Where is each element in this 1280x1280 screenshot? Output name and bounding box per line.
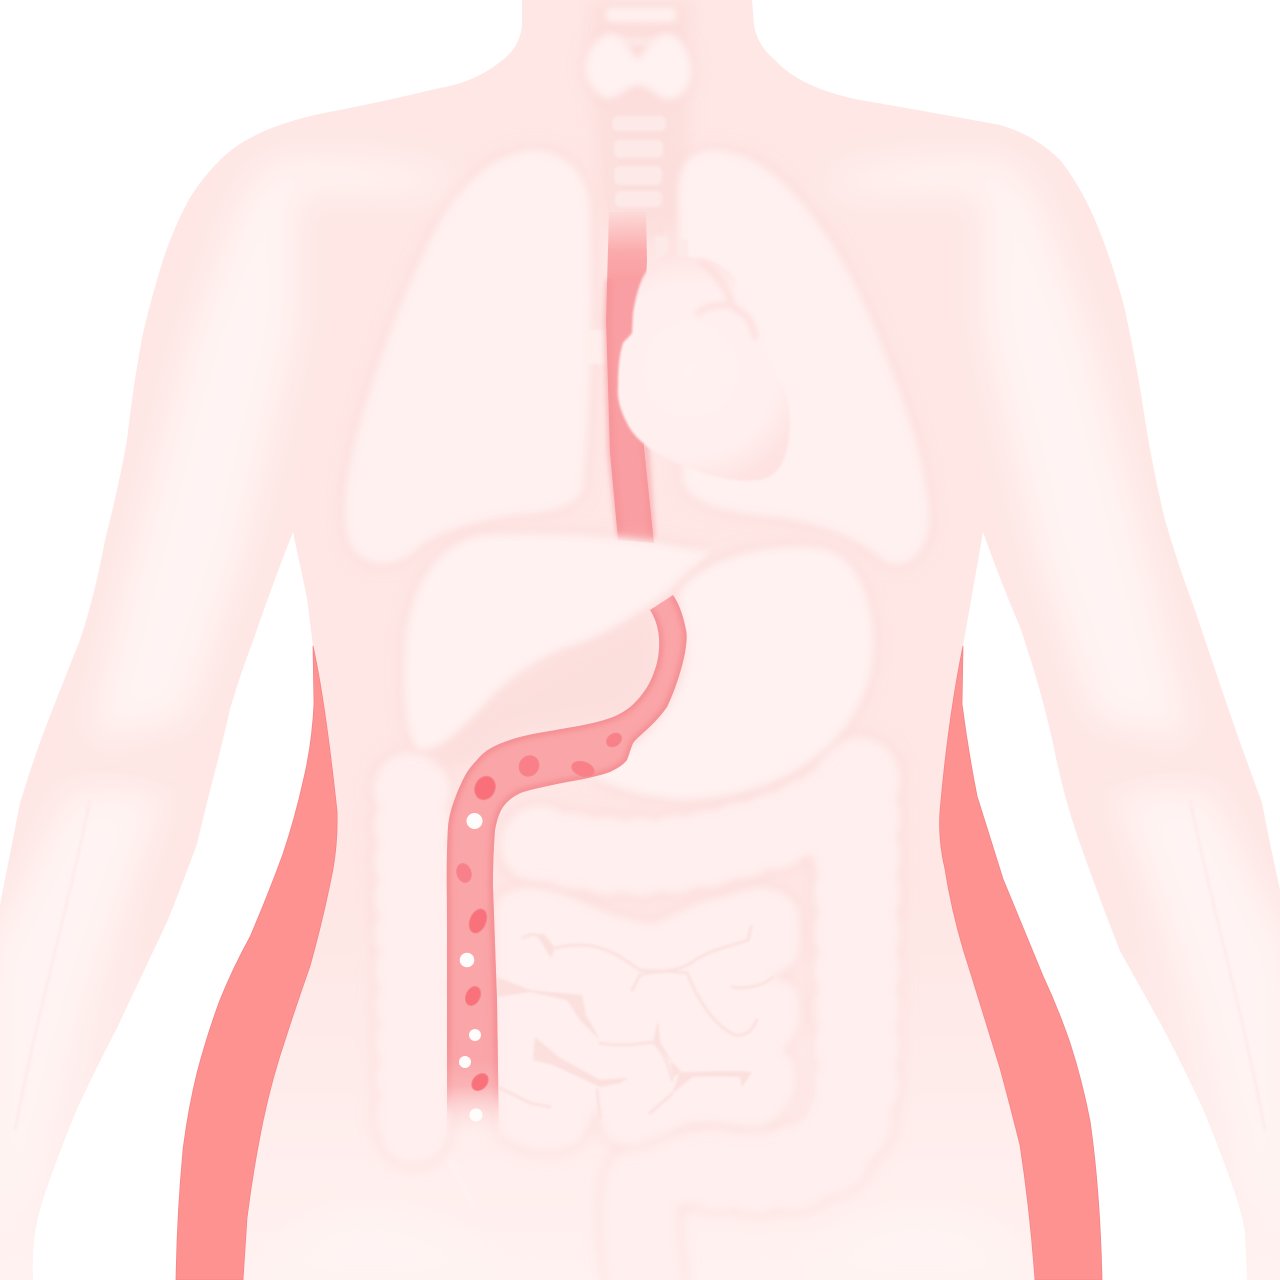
stomach: [590, 546, 874, 800]
duodenum and small bowel tube: [447, 595, 687, 1135]
arm and chest highlights: [0, 166, 1280, 1088]
bronchus: [585, 330, 607, 364]
intestine folds: [497, 934, 752, 1094]
white particles: [459, 813, 482, 1122]
nutrient particles: [454, 730, 624, 1094]
tube edge shade: [447, 595, 687, 1135]
great vessels: [655, 236, 688, 270]
left lung: [345, 150, 592, 564]
throat shading: [590, 0, 692, 240]
small intestine: [495, 887, 801, 1152]
right red body edge: [940, 646, 1102, 1280]
thyroid: [585, 33, 692, 100]
ascending colon: [412, 795, 414, 1130]
trachea rings: [612, 116, 666, 207]
appendix: [446, 1160, 480, 1214]
descending and sigmoid colon: [639, 780, 857, 1280]
transverse colon: [540, 800, 830, 857]
oesophagus edge shading: [607, 280, 652, 538]
wrist and forearm bone lines: [15, 768, 1265, 1130]
intestine mass: [495, 887, 801, 1152]
heart: [618, 253, 790, 481]
oesophagus: [606, 212, 654, 543]
tube body: [447, 595, 687, 1135]
large intestine: [412, 780, 857, 1280]
right lung: [678, 150, 930, 565]
larynx rings: [606, 8, 676, 46]
left red body edge: [176, 646, 337, 1280]
shadow beneath liver: [430, 610, 665, 770]
heart lobe shading: [696, 262, 756, 340]
liver: [404, 534, 712, 750]
